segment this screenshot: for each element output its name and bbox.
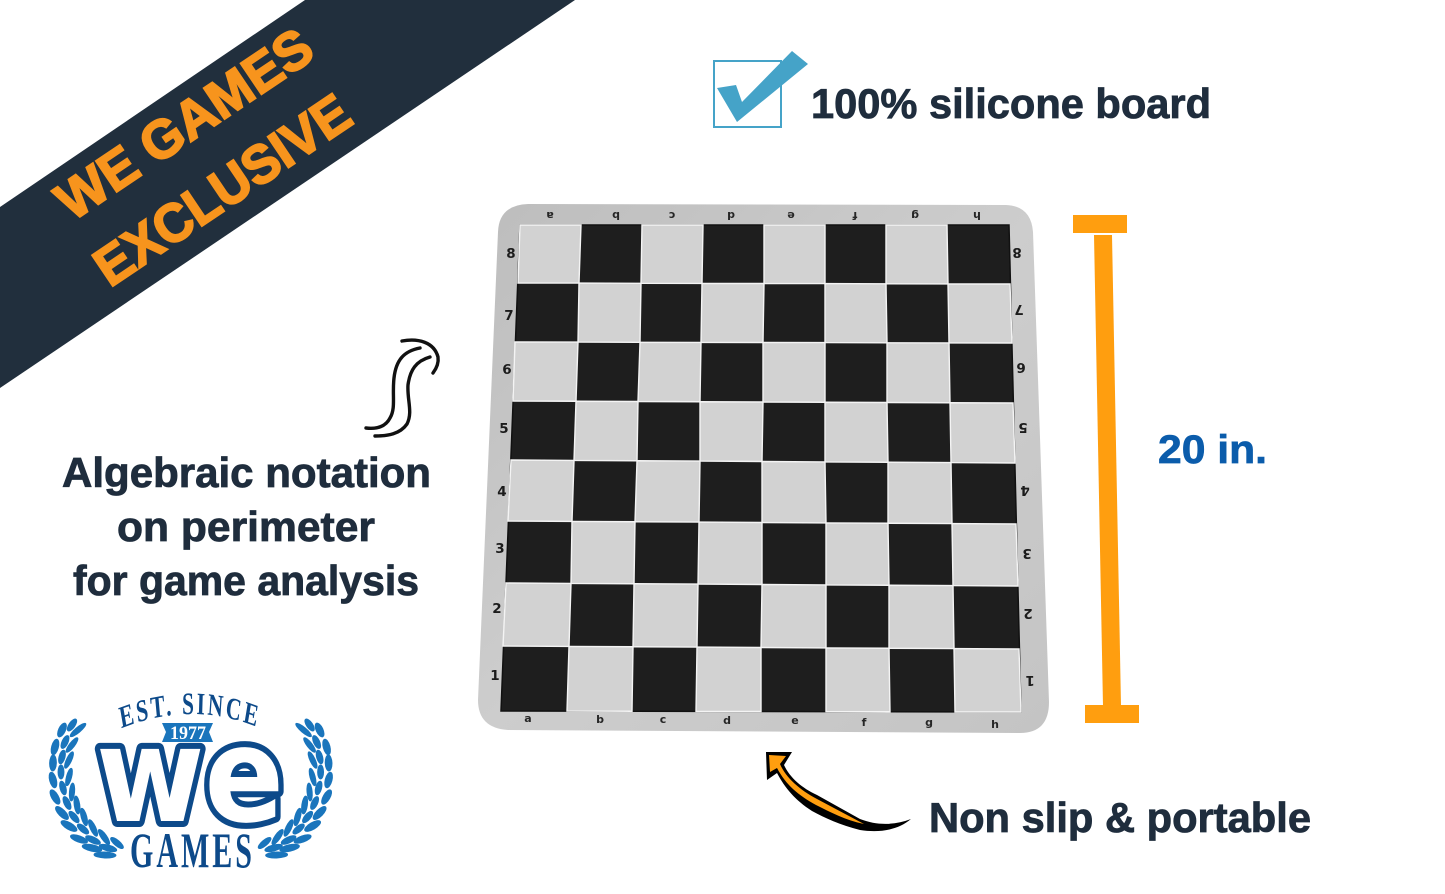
dimension bar: 20 inch [1073,215,1139,723]
text: algebraic notation callout: for game analysis [73,557,419,604]
text: non slip and portable: Non slip & portable [929,794,1311,841]
left rank labels: 2 [492,601,502,617]
top file labels upside down: g [911,209,919,222]
left laurel [48,718,125,858]
top file labels upside down: e [787,209,795,222]
bottom file labels: b [596,713,604,726]
bottom file labels: a [524,712,532,725]
right rank labels upside down: 8 [1012,244,1022,260]
left rank labels: 5 [499,421,509,437]
banner: WE Games exclusive [0,0,575,388]
icon: checkbox with tick [714,51,808,127]
dimension label: 20 in. [1158,428,1267,472]
right rank labels upside down [1012,244,1035,688]
bottom file labels: f [862,716,867,729]
bottom file labels [524,712,999,731]
logo wordmark: we: we [96,699,284,853]
text: algebraic notation callout: on perimeter [117,503,375,550]
text: algebraic notation callout: Algebraic notation [62,449,431,496]
left rank labels: 1 [490,668,500,684]
top file labels upside down: c [669,209,675,222]
top file labels upside down: a [546,209,554,222]
left rank labels: 3 [495,541,505,557]
light squares [503,225,1021,712]
logo ribbon: 1977: 1977 [170,723,206,744]
top file labels upside down: f [852,209,857,222]
right rank labels upside down: 5 [1018,419,1028,435]
right rank labels upside down: 6 [1016,359,1026,375]
text: algebraic notation callout [62,449,431,604]
arrow: points to board edge [766,752,911,831]
logo text: est since: EST. SINCE [118,693,258,728]
left rank labels: 7 [504,308,514,324]
top file labels upside down: b [612,209,620,222]
board mat [478,204,1049,733]
right rank labels upside down: 3 [1022,545,1032,561]
banner text line 1: WE GAMES [45,17,324,232]
top file labels upside down [546,209,981,222]
top file labels upside down: d [727,209,735,222]
bottom file labels: c [660,713,666,726]
left rank labels [490,246,516,684]
right rank labels upside down: 4 [1020,482,1030,498]
bottom file labels: d [723,714,731,727]
logo text: games: GAMES [130,822,255,878]
bottom file labels: h [991,718,999,731]
right rank labels upside down: 1 [1025,672,1035,688]
logo: WE Games [48,693,333,878]
right laurel [257,718,334,858]
icon: curved swirl lines [366,340,438,436]
left rank labels: 4 [497,484,507,500]
top file labels upside down: h [973,209,981,222]
left rank labels: 6 [502,362,512,378]
chess board [478,204,1049,733]
bottom file labels: g [925,716,933,729]
bottom file labels: e [791,714,799,727]
banner text line 2: EXCLUSIVE [83,83,362,298]
right rank labels upside down: 2 [1023,605,1033,621]
left rank labels: 8 [506,246,516,262]
heading: 100% silicone board: 100% silicone board [811,80,1211,127]
dark squares base [501,225,1021,712]
right rank labels upside down: 7 [1014,301,1024,317]
